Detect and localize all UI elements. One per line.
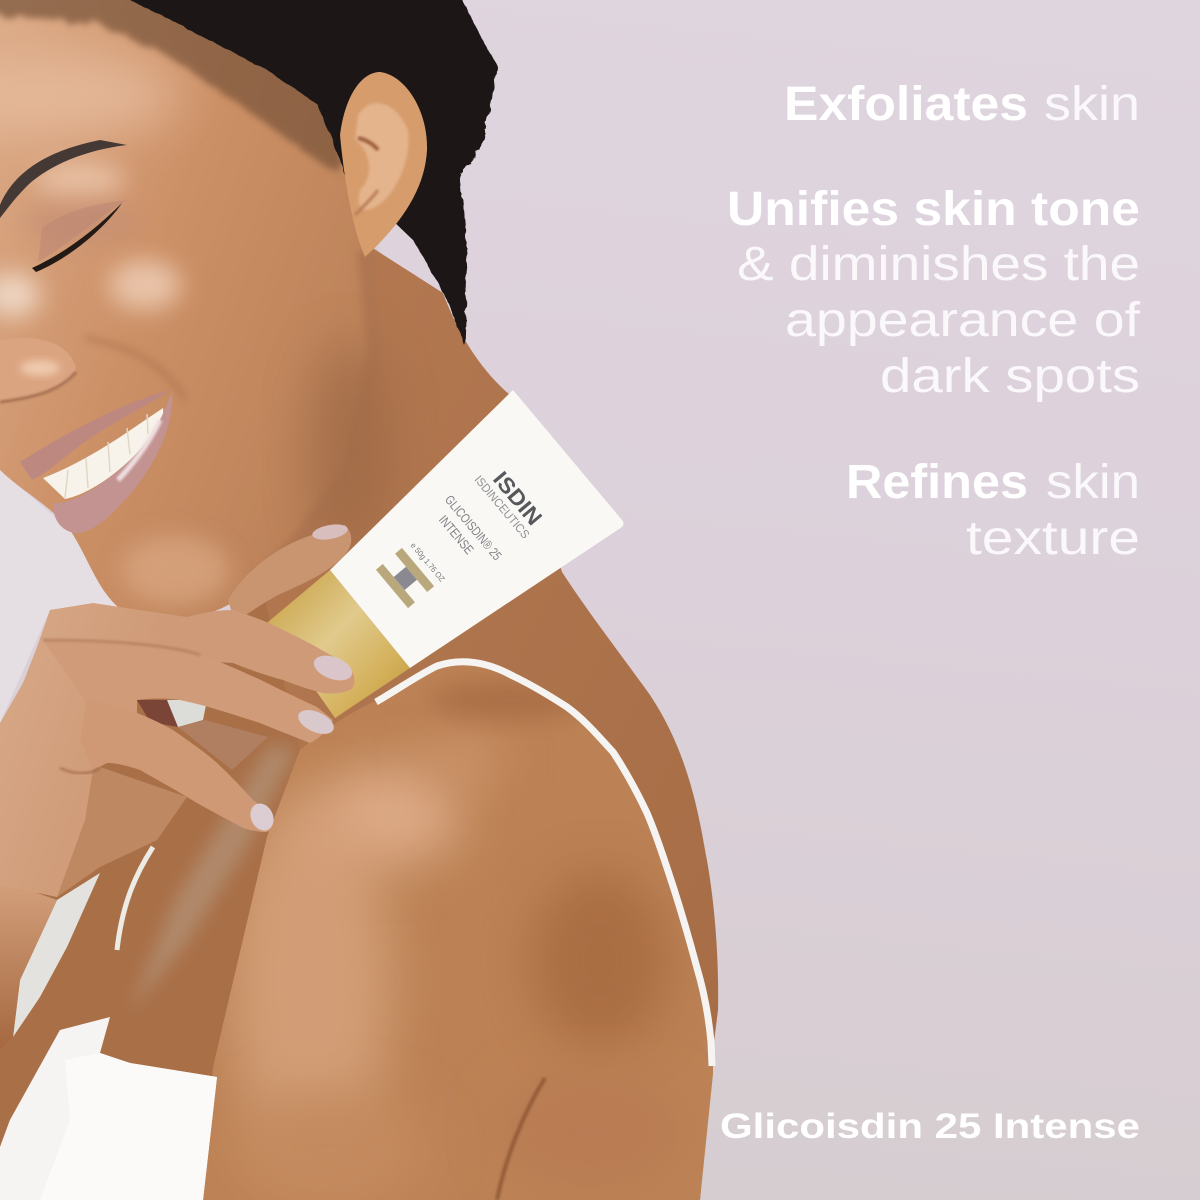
middle finger xyxy=(43,640,333,743)
face xyxy=(0,0,375,620)
benefit: exfoliates: skin xyxy=(1044,78,1140,131)
top band xyxy=(430,680,590,720)
benefit: exfoliates: Exfoliates xyxy=(784,78,1028,131)
ring nail xyxy=(246,800,278,834)
smile crease xyxy=(85,338,185,400)
closed eye xyxy=(32,200,128,272)
tube body xyxy=(330,390,623,668)
palm and knuckles xyxy=(0,603,200,897)
tube labels: e 50g 1.76 OZ xyxy=(409,541,447,584)
reflection streak xyxy=(130,745,295,1010)
tube labels: ISDIN xyxy=(488,467,547,530)
index nail xyxy=(310,651,356,685)
shoulder highlight xyxy=(320,765,460,865)
hand xyxy=(0,522,356,897)
pale gap beside forearm xyxy=(13,873,100,1037)
jaw shadow xyxy=(310,340,390,560)
tube labels xyxy=(409,467,547,584)
middle nail xyxy=(295,705,337,739)
left strap xyxy=(117,847,153,950)
benefit: refines: texture xyxy=(966,512,1140,565)
index finger xyxy=(150,610,354,694)
right strap xyxy=(376,662,712,1066)
dark hair mass xyxy=(105,0,497,345)
pale backdrop left xyxy=(0,470,130,723)
cheek highlight xyxy=(109,260,181,310)
armpit crease xyxy=(497,1078,545,1200)
benefit: unifies skin tone: appearance of xyxy=(785,294,1141,347)
benefit: refines: skin xyxy=(1046,456,1140,509)
ring finger xyxy=(80,700,273,832)
benefit: unifies skin tone: dark spots xyxy=(880,350,1140,403)
benefit: unifies skin tone xyxy=(727,183,1141,403)
finger separation xyxy=(43,640,200,655)
benefit: unifies skin tone: & diminishes the xyxy=(737,238,1140,291)
shoulder and arm xyxy=(203,662,713,1200)
white dress xyxy=(0,1017,217,1200)
teeth xyxy=(43,408,163,499)
chest and forearm base xyxy=(0,600,300,1147)
lower lip xyxy=(54,390,172,533)
forearm xyxy=(0,880,57,1050)
thumb nail xyxy=(311,522,349,542)
tube cap xyxy=(268,570,410,718)
tube labels: ISDINCEUTICS xyxy=(472,473,532,541)
jaw blend xyxy=(255,250,375,585)
upper lip xyxy=(20,390,170,480)
frizzy hairline xyxy=(0,0,345,175)
gap between fingers dark xyxy=(137,700,178,727)
mouth xyxy=(20,390,172,533)
tube logo mark xyxy=(376,548,434,608)
eyelid tint xyxy=(46,208,79,224)
hair xyxy=(0,0,497,345)
product tube xyxy=(268,390,623,718)
benefit: refines: Refines xyxy=(846,456,1028,509)
eyebrow xyxy=(0,140,127,218)
knuckle crease xyxy=(60,768,100,773)
benefit: unifies skin tone: Unifies skin tone xyxy=(727,183,1140,236)
tube labels: INTENSE xyxy=(436,512,477,557)
lit arm side xyxy=(230,790,390,1170)
nose xyxy=(0,338,76,402)
lower chest under fingers xyxy=(178,720,268,770)
lower arm tone xyxy=(500,1075,680,1185)
product name: Glicoisdin 25 Intense xyxy=(720,1107,1140,1146)
benefit: refines xyxy=(846,456,1140,565)
palm shadow xyxy=(30,760,187,897)
benefits text xyxy=(727,78,1141,565)
photo: smiling woman with product xyxy=(0,0,718,1200)
neck and back xyxy=(203,240,718,1200)
gap between fingers pale xyxy=(167,700,207,727)
thumb xyxy=(228,525,351,622)
forehead glow xyxy=(0,55,180,135)
benefit: exfoliates xyxy=(784,78,1140,131)
deltoid shadow xyxy=(530,870,670,1050)
chin glow xyxy=(120,535,230,605)
tube labels: GLICOISDIN® 25 xyxy=(442,492,505,563)
ear xyxy=(340,72,427,257)
